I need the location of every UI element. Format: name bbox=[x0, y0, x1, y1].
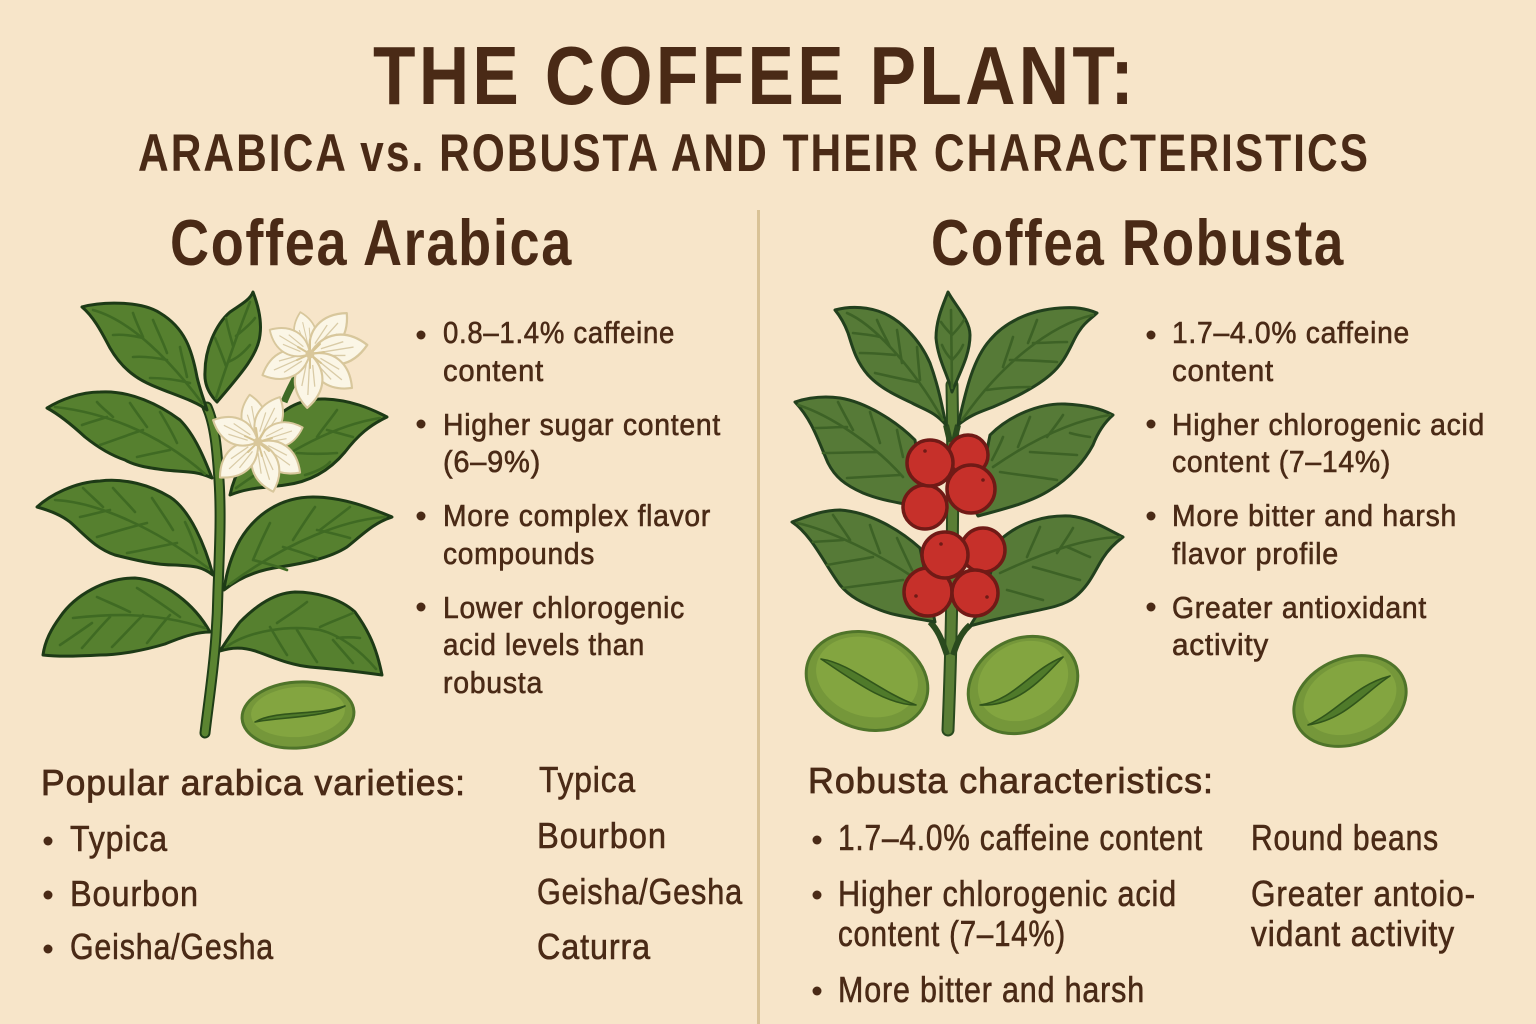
arabica stem bbox=[205, 407, 220, 733]
text block: arabica traits: acid levels than bbox=[443, 627, 645, 662]
text block: robusta traits: content bbox=[1172, 353, 1274, 388]
arabica green bean bbox=[240, 678, 356, 752]
text block: robusta traits: activity bbox=[1172, 627, 1269, 662]
flower stalk bbox=[284, 375, 297, 402]
title bbox=[138, 29, 1370, 183]
list: arabica variety names column: Bourbon bbox=[537, 815, 667, 856]
text block: arabica traits: robusta bbox=[443, 665, 543, 700]
arabica lower flower bbox=[207, 391, 308, 496]
heading: Coffea Robusta: Coffea Robusta bbox=[931, 206, 1345, 279]
list: arabica variety names column: Geisha/Gesha bbox=[537, 871, 743, 912]
title: THE COFFEE PLANT: bbox=[373, 29, 1137, 122]
list: popular arabica varieties: Popular arabica varieties: bbox=[41, 762, 466, 803]
text block: arabica traits: compounds bbox=[443, 536, 595, 571]
list: robusta extra characteristics: vidant activity bbox=[1251, 913, 1455, 954]
list: robusta characteristics: Higher chlorogenic acid bbox=[838, 873, 1177, 914]
text block: robusta traits: flavor profile bbox=[1172, 536, 1339, 571]
text block: robusta traits bbox=[1146, 315, 1485, 662]
list: robusta characteristics bbox=[808, 760, 1214, 1010]
list: robusta characteristics: More bitter and harsh bbox=[838, 969, 1145, 1010]
icon: standalone robusta bean bbox=[1280, 639, 1420, 763]
heading: Coffea Arabica: Coffea Arabica bbox=[170, 206, 573, 279]
text block: arabica traits bbox=[416, 315, 721, 700]
list: robusta extra characteristics bbox=[1251, 817, 1476, 954]
robusta upper cherries bbox=[903, 435, 995, 529]
list: robusta characteristics: content (7–14%) bbox=[838, 913, 1066, 954]
text block: arabica traits: More complex flavor bbox=[443, 498, 711, 533]
list: arabica variety names column: Caturra bbox=[537, 926, 651, 967]
arabica leaves bbox=[37, 292, 392, 675]
text block: arabica traits: 0.8–1.4% caffeine bbox=[443, 315, 675, 350]
list: arabica variety names column: Typica bbox=[539, 759, 636, 800]
robusta lower cherries bbox=[904, 528, 1005, 616]
illustration: robusta plant bbox=[792, 292, 1123, 752]
text block: robusta traits: More bitter and harsh bbox=[1172, 498, 1457, 533]
list: arabica variety names column bbox=[537, 759, 743, 967]
robusta leaves bbox=[792, 292, 1123, 626]
text block: arabica traits: Lower chlorogenic bbox=[443, 590, 685, 625]
list: popular arabica varieties: Geisha/Gesha bbox=[70, 926, 274, 967]
list: popular arabica varieties: Bourbon bbox=[70, 873, 199, 914]
list: popular arabica varieties: Typica bbox=[70, 818, 168, 859]
list: robusta characteristics: 1.7–4.0% caffeine content bbox=[838, 817, 1203, 858]
arabica upper flower bbox=[257, 304, 370, 409]
text block: arabica traits: content bbox=[443, 353, 544, 388]
illustration: arabica plant bbox=[37, 292, 392, 752]
text block: robusta traits: Higher chlorogenic acid bbox=[1172, 407, 1485, 442]
text block: robusta traits: content (7–14%) bbox=[1172, 444, 1391, 479]
robusta green bean left bbox=[793, 616, 941, 746]
text block: robusta traits: 1.7–4.0% caffeine bbox=[1172, 315, 1410, 350]
robusta green bean right bbox=[951, 618, 1095, 752]
list: robusta extra characteristics: Round beans bbox=[1251, 817, 1439, 858]
list: popular arabica varieties bbox=[41, 762, 466, 967]
list: robusta extra characteristics: Greater antoio- bbox=[1251, 873, 1476, 914]
text block: arabica traits: (6–9%) bbox=[443, 444, 541, 479]
text block: arabica traits: Higher sugar content bbox=[443, 407, 721, 442]
text block: robusta traits: Greater antioxidant bbox=[1172, 590, 1427, 625]
list: robusta characteristics: Robusta characteristics: bbox=[808, 760, 1214, 801]
robusta stem bbox=[930, 385, 970, 730]
